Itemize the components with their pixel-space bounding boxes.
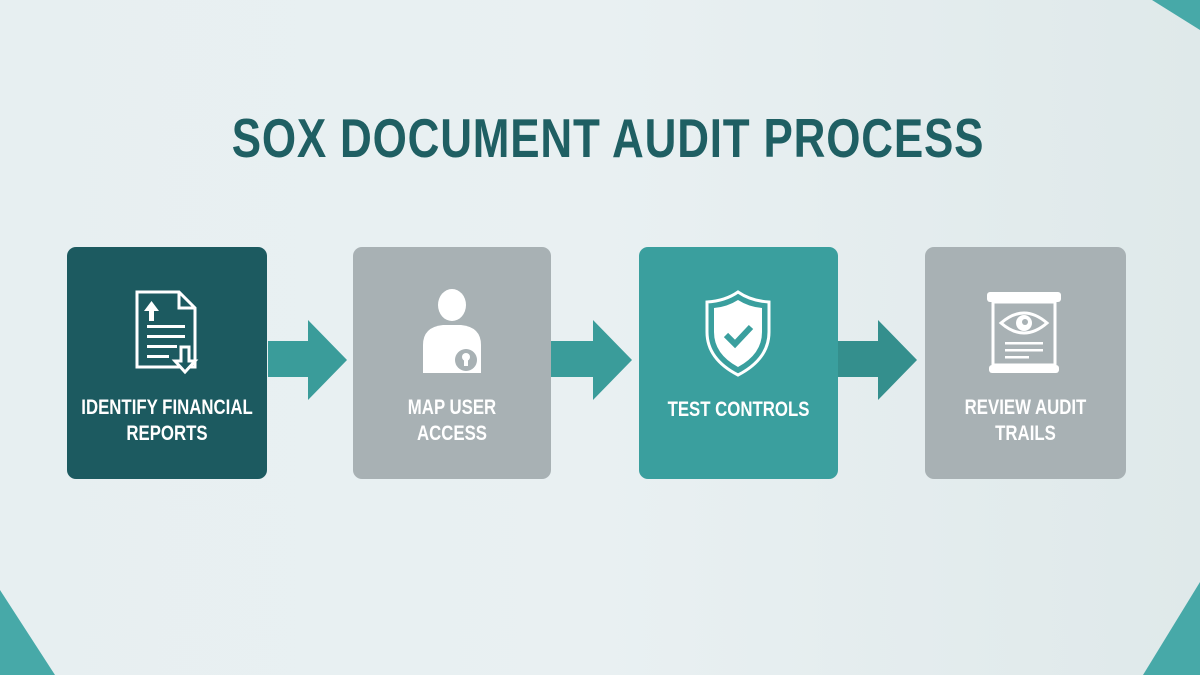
icon: user: [423, 289, 481, 373]
panel: review audit trails: [925, 247, 1126, 479]
arrow 1: [268, 320, 347, 400]
label: [81, 396, 253, 445]
label: TEST CONTROLS: [668, 398, 809, 421]
panel: identify financial reports: [67, 247, 267, 479]
label: ACCESS: [417, 422, 487, 445]
arrow 2: [551, 320, 632, 400]
label: [965, 396, 1086, 445]
icon: scroll with eye: [987, 292, 1061, 373]
panel: test controls: [639, 247, 838, 479]
icon: shield: [706, 290, 770, 377]
title: SOX DOCUMENT AUDIT PROCESS: [232, 107, 984, 169]
label: REPORTS: [126, 422, 208, 445]
label: MAP USER: [408, 396, 496, 419]
arrow 3: [838, 320, 917, 400]
label: REVIEW AUDIT: [965, 396, 1086, 419]
icon: document: [136, 290, 198, 374]
panel: map user access: [353, 247, 551, 479]
label: IDENTIFY FINANCIAL: [81, 396, 253, 419]
label: [408, 396, 496, 445]
label: TRAILS: [995, 422, 1056, 445]
